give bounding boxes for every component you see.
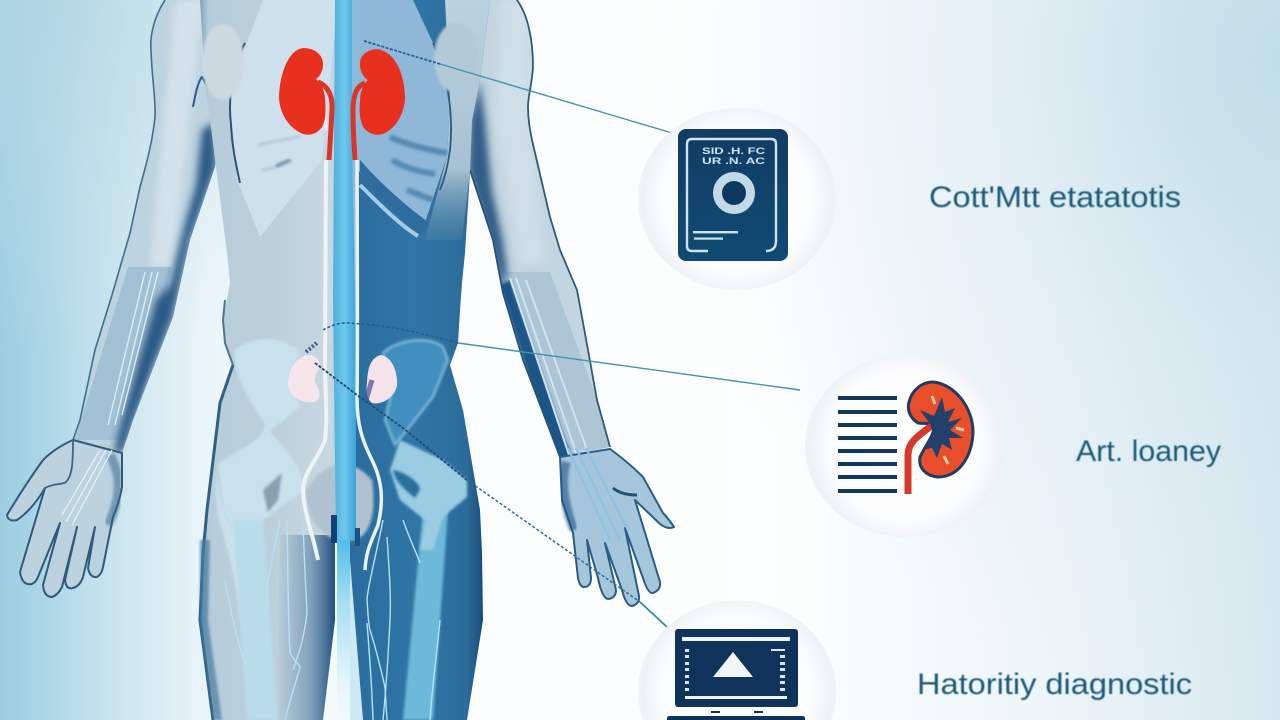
icon: report document: SID .H. FC — [702, 146, 766, 156]
right arm — [468, 0, 610, 460]
femur left — [233, 520, 278, 720]
torso and left leg — [200, 0, 345, 720]
left arm — [73, 0, 226, 455]
hip bone right — [390, 440, 467, 550]
icon: report document — [678, 129, 788, 261]
bladder lobes — [288, 342, 397, 403]
icon: report document: UR .N. AC — [702, 156, 766, 166]
human body figure — [7, 0, 674, 720]
pelvic bowl — [306, 464, 373, 540]
outer edge shading — [200, 300, 335, 720]
ribcage right — [230, 0, 451, 237]
obturator hole right — [393, 470, 420, 498]
obturator hole left — [263, 473, 282, 512]
right hand — [560, 448, 674, 606]
icon: kidney — [908, 382, 973, 494]
connector: middle — [323, 323, 800, 390]
label: bottom: Hatoritiy diagnostic — [917, 668, 1192, 701]
pelvis right — [383, 340, 448, 445]
icon disc: monitor — [638, 600, 836, 720]
ureters — [303, 82, 381, 570]
connector: top — [364, 41, 672, 133]
right torso and right leg — [345, 0, 490, 720]
shoulder caps — [202, 23, 478, 100]
left hand — [7, 440, 122, 597]
icon disc: kidney — [805, 355, 1005, 537]
icon: ultrasound monitor — [667, 629, 805, 720]
icon disc: report card — [638, 108, 836, 290]
ribcage left — [230, 0, 338, 237]
label: middle: Art. loaney — [1076, 435, 1221, 468]
pelvis left — [216, 339, 300, 620]
central blue column — [331, 0, 363, 720]
hip left — [218, 428, 305, 552]
icon: list lines — [838, 396, 897, 493]
upper right torso shading — [425, 0, 490, 240]
femur right — [403, 510, 448, 720]
kidneys — [279, 48, 405, 135]
connector: bottom — [315, 363, 667, 627]
label: top: Cott'Mtt etatatotis — [929, 181, 1181, 214]
leg vessels — [225, 520, 440, 720]
